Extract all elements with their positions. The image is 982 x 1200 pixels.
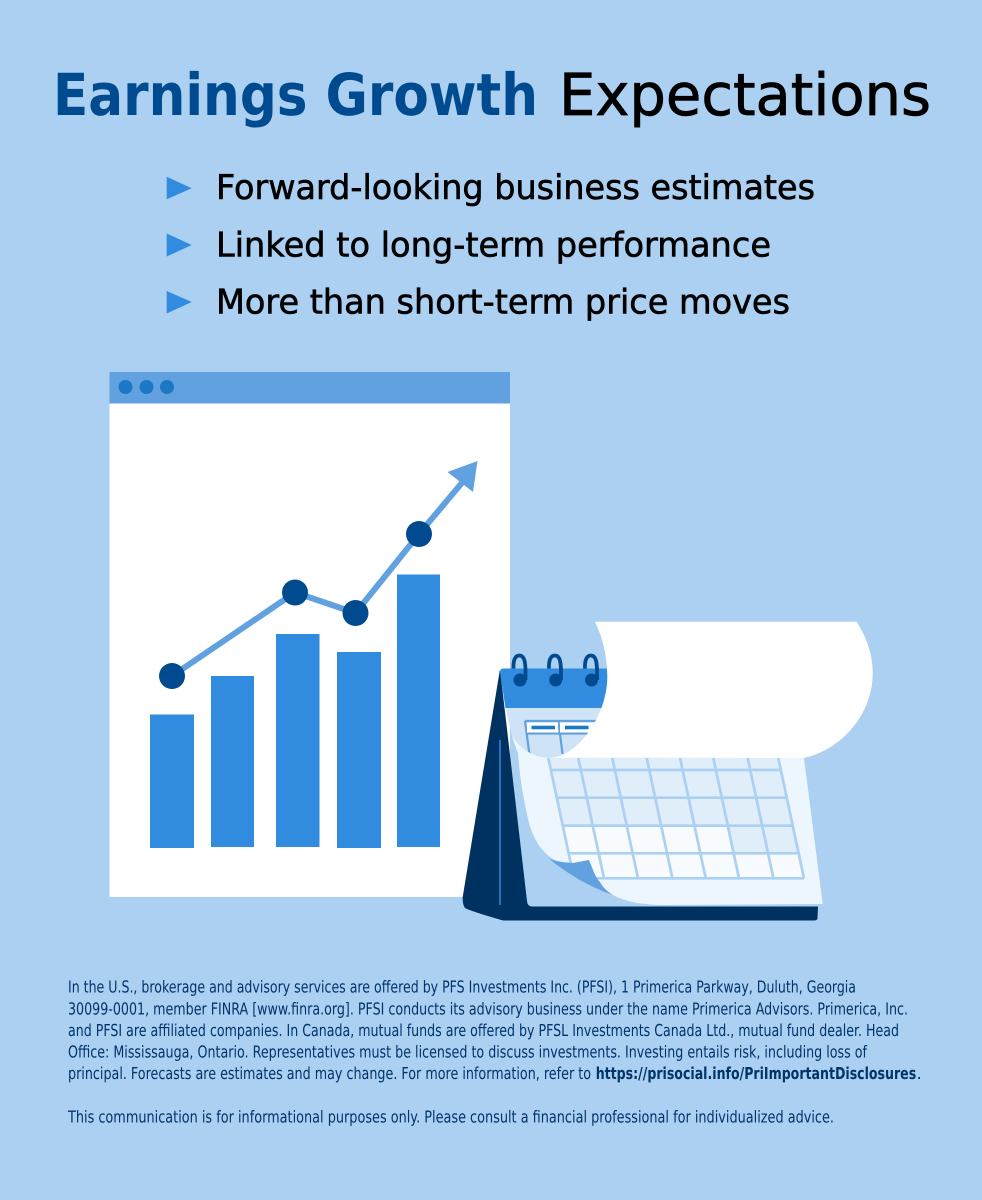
disclosure paragraph: .	[916, 1064, 922, 1083]
disclosure paragraph	[68, 978, 922, 1083]
turning page	[550, 622, 873, 758]
bullet 3: More than short-term price moves	[216, 282, 790, 322]
bullet 2: Linked to long-term performance	[216, 226, 771, 266]
title: Earnings Growth	[53, 61, 538, 129]
disclosure text	[67, 978, 922, 1126]
title: Expectations	[559, 61, 931, 129]
ring ends	[514, 668, 598, 686]
bullet 1: Forward-looking business estimates	[216, 168, 815, 208]
disclosure paragraph: principal. Forecasts are estimates and may change. For more information, refer to	[68, 1064, 591, 1083]
back sheet	[506, 708, 612, 758]
window body	[110, 372, 510, 897]
icon: desk calendar	[463, 622, 873, 920]
front sheet with page corner curl	[512, 735, 823, 905]
title	[53, 61, 931, 129]
calendar grid	[548, 758, 804, 878]
bar chart	[150, 574, 440, 848]
calendar stand	[463, 669, 818, 920]
calendar header band	[500, 668, 612, 708]
bullet list	[167, 168, 815, 322]
calendar rings back	[513, 656, 597, 680]
panel: browser window with chart	[110, 372, 510, 897]
page corner fold	[547, 857, 613, 895]
window title bar	[110, 372, 510, 404]
trend arrow	[159, 461, 478, 689]
